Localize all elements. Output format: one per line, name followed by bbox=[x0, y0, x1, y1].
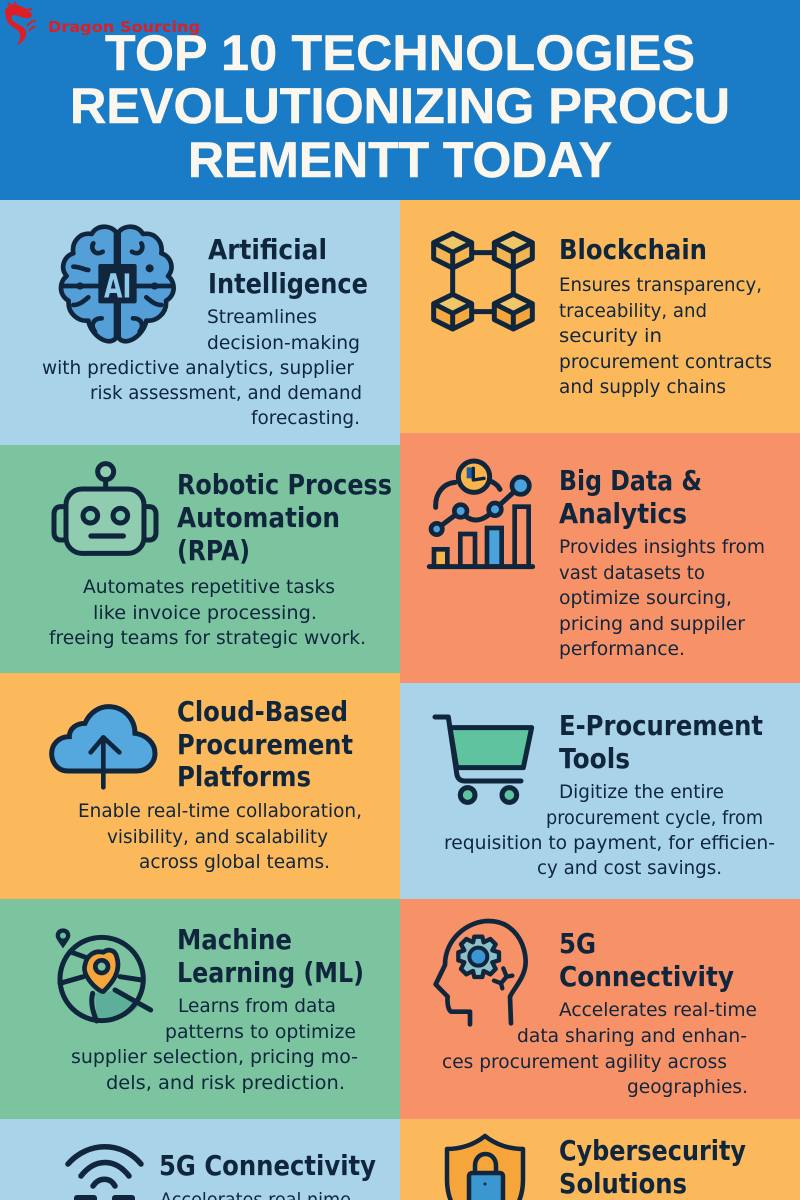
heading: 5G Connectivity bbox=[159, 1149, 376, 1182]
title: TOP 10 TECHNOLOGIES bbox=[105, 25, 695, 81]
heading bbox=[177, 468, 392, 567]
panel: Robotic Process Automation bbox=[0, 445, 400, 673]
heading: Cloud-Based bbox=[177, 695, 348, 728]
description: Provides insights from bbox=[559, 536, 765, 558]
heading bbox=[177, 695, 353, 793]
panel: Cybersecurity Solutions bbox=[400, 1119, 800, 1200]
description: optimize sourcing, bbox=[559, 587, 732, 609]
heading: Big Data & bbox=[559, 464, 702, 497]
panel: E-Procurement Tools bbox=[400, 683, 800, 899]
description: Automates repetitive tasks bbox=[83, 576, 335, 598]
description: Accelerates real-time bbox=[559, 999, 757, 1021]
icon: wifi signal bbox=[68, 1147, 141, 1200]
description bbox=[559, 536, 765, 660]
heading: Cybersecurity bbox=[559, 1134, 746, 1167]
description: visibility, and scalability bbox=[107, 826, 328, 848]
description: risk assessment, and demand bbox=[90, 382, 362, 404]
panel: Artificial Intelligence bbox=[0, 200, 400, 445]
panel: Machine Learning bbox=[0, 899, 400, 1119]
icon: cloud upload bbox=[52, 707, 155, 787]
icon: AI brain bbox=[61, 227, 174, 341]
heading bbox=[559, 927, 734, 993]
description bbox=[78, 800, 362, 873]
description: data sharing and enhan- bbox=[517, 1025, 747, 1047]
description: freeing teams for strategic wvork. bbox=[49, 627, 366, 649]
description bbox=[442, 999, 757, 1098]
description: cy and cost savings. bbox=[537, 857, 722, 879]
description: geographies. bbox=[627, 1076, 748, 1098]
description: pricing and suppiler bbox=[559, 613, 745, 635]
description bbox=[559, 274, 772, 398]
heading bbox=[177, 923, 364, 989]
description: Digitize the entire bbox=[559, 781, 724, 803]
description: procurement contracts bbox=[559, 351, 772, 373]
icon: security shield with lock bbox=[447, 1136, 523, 1200]
heading: Intelligence bbox=[208, 267, 368, 300]
icon: shopping cart bbox=[435, 717, 532, 802]
panel: Cloud-Based Procurement Platforms bbox=[0, 673, 400, 899]
heading bbox=[208, 233, 368, 300]
heading: Blockchain bbox=[559, 233, 707, 266]
heading: 5G bbox=[559, 927, 596, 960]
description: security in bbox=[559, 325, 662, 347]
description: Streamlines bbox=[207, 306, 317, 328]
description bbox=[71, 995, 358, 1094]
description: dels, and risk prediction. bbox=[106, 1072, 345, 1094]
heading: Machine bbox=[177, 923, 292, 956]
heading: Procurement bbox=[177, 728, 353, 761]
description: procurement cycle, from bbox=[546, 807, 763, 829]
heading bbox=[559, 1134, 746, 1200]
heading: Learning (ML) bbox=[177, 956, 364, 989]
description bbox=[42, 306, 362, 429]
heading: Automation bbox=[177, 501, 340, 534]
description bbox=[444, 781, 775, 879]
icon: AI brain: AI bbox=[104, 266, 131, 305]
heading: Platforms bbox=[177, 760, 311, 793]
logo: Dragon Sourcing: Dragon Sourcing bbox=[48, 18, 200, 36]
description: supplier selection, pricing mo- bbox=[71, 1046, 358, 1068]
description: and supply chains bbox=[559, 376, 726, 398]
description: decision-making bbox=[207, 332, 360, 354]
header banner bbox=[0, 0, 800, 200]
icon: head with gear bbox=[436, 921, 526, 1024]
description: across global teams. bbox=[139, 851, 330, 873]
description: like invoice processing. bbox=[93, 602, 317, 624]
description: performance. bbox=[559, 638, 685, 660]
heading: Analytics bbox=[559, 497, 687, 530]
heading: E-Procurement bbox=[559, 709, 763, 742]
description: with predictive analytics, supplier bbox=[42, 357, 354, 379]
description: vast datasets to bbox=[559, 562, 705, 584]
logo: Dragon Sourcing bbox=[5, 2, 200, 45]
description bbox=[49, 576, 366, 649]
heading: Tools bbox=[559, 742, 630, 775]
description: forecasting. bbox=[251, 407, 360, 429]
icon: globe with location pin bbox=[56, 928, 151, 1021]
description: requisition to payment, for efficien- bbox=[444, 832, 775, 854]
panel: 5G Connectivity (head icon) bbox=[400, 899, 800, 1119]
panel: Big Data and Analytics bbox=[400, 433, 800, 683]
heading bbox=[559, 709, 763, 775]
icon: blockchain cubes bbox=[434, 233, 532, 329]
title bbox=[70, 25, 730, 188]
heading bbox=[559, 464, 702, 530]
heading: Connectivity bbox=[559, 960, 734, 993]
panel: 5G Connectivity (wifi icon) bbox=[0, 1119, 400, 1200]
description: Enable real-time collaboration, bbox=[78, 800, 362, 822]
description: ces procurement agility across bbox=[442, 1051, 727, 1073]
description: patterns to optimize bbox=[165, 1021, 356, 1043]
description: Learns from data bbox=[178, 995, 336, 1017]
panel: Blockchain bbox=[400, 200, 800, 433]
description: traceability, and bbox=[559, 300, 707, 322]
icon: analytics chart bbox=[429, 461, 533, 567]
title: REVOLUTIONIZING PROCU bbox=[70, 78, 730, 134]
heading: Solutions bbox=[559, 1167, 687, 1200]
title: REMENTT TODAY bbox=[188, 132, 612, 188]
description: Ensures transparency, bbox=[559, 274, 762, 296]
heading: Artificial bbox=[208, 233, 327, 266]
heading: Robotic Process bbox=[177, 468, 392, 501]
icon: robot bbox=[54, 464, 156, 553]
heading: (RPA) bbox=[177, 534, 250, 567]
